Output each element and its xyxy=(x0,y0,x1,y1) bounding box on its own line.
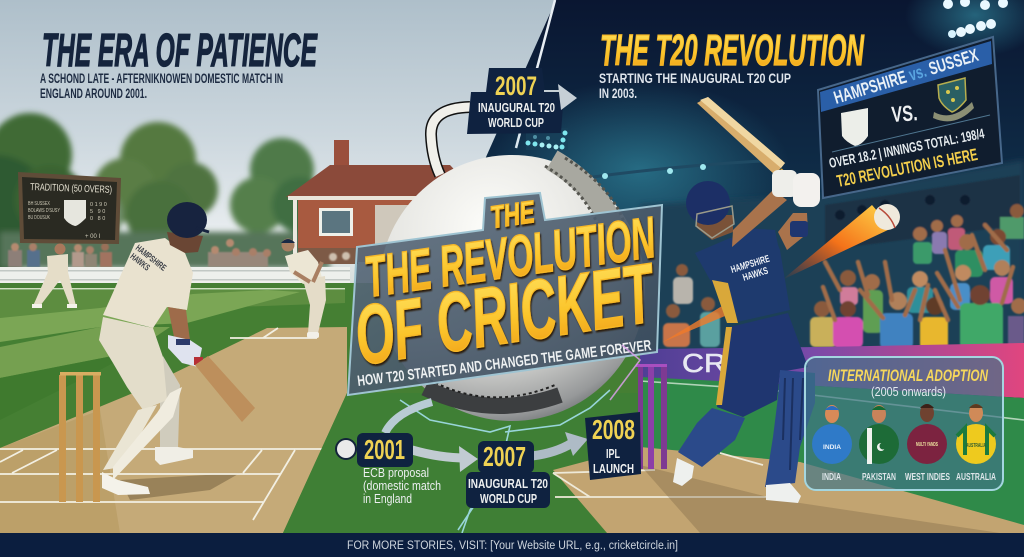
footer bar xyxy=(0,533,1024,557)
wicket stumps right xyxy=(636,364,667,469)
arrow: 2007 badge pointing right xyxy=(544,84,577,110)
icon: west indies player: MULTI YANDS xyxy=(916,442,938,448)
scoreboard left: BH SUSSEX xyxy=(28,201,51,207)
advertising band xyxy=(640,343,1024,398)
left outfield grass xyxy=(0,283,680,533)
country labels: WEST INDIES xyxy=(905,471,950,483)
scoreboard right: HAMPSHIRE vs. SUSSEX xyxy=(831,45,981,108)
floodlights top right xyxy=(905,0,1024,57)
arrow: 2001 to 2007 xyxy=(412,446,478,472)
arrow: 2007 to 2008 xyxy=(532,432,588,456)
timeline xyxy=(335,402,641,508)
scoreboard right: VS. xyxy=(891,100,918,127)
arrow: 2001 ball swoosh xyxy=(385,402,432,433)
milestone: 2001: ECB proposal xyxy=(363,465,429,480)
crowd in the stands xyxy=(640,160,1024,350)
icon: australia player: AUSTRALIA xyxy=(966,443,986,449)
scoreboard right xyxy=(818,37,1002,198)
house xyxy=(286,140,480,264)
milestone: 2001 xyxy=(357,433,441,506)
milestone: 2008: LAUNCH xyxy=(593,461,634,476)
scoreboard left: TRADITION (50 OVERS) xyxy=(30,182,112,196)
icon: india player: INDIA xyxy=(823,444,841,451)
jersey text right: HAWKS xyxy=(741,266,770,284)
title text xyxy=(349,194,663,383)
adoption date: (2005 onwards) xyxy=(871,384,946,399)
advertising band: CR xyxy=(682,348,726,378)
badge: 2007 world cup upper: WORLD CUP xyxy=(488,115,544,130)
milestone: 2007 xyxy=(466,441,550,508)
white divider edge xyxy=(516,0,555,148)
icon: timeline ball xyxy=(335,438,357,460)
jersey text left: HAMPSHIRE xyxy=(134,243,168,273)
floodlights middle xyxy=(526,128,780,179)
right side grass xyxy=(640,377,1024,533)
milestone: 2007: INAUGURAL T20 xyxy=(468,476,548,491)
icon: west indies player xyxy=(907,404,947,464)
text block: t20 revolution description: STARTING THE INAUGURAL T20 CUP xyxy=(599,71,791,86)
spectators behind the fence xyxy=(8,239,350,267)
milestone: 2008 xyxy=(585,412,641,480)
lightning effects xyxy=(400,345,640,533)
batter right in navy kit xyxy=(673,97,820,503)
text block: era of patience description: ENGLAND AROUND 2001. xyxy=(40,86,147,101)
milestone: 2001: in England xyxy=(363,491,412,506)
centre grass xyxy=(283,393,640,533)
batter left in cream kit xyxy=(99,202,255,495)
milestone: 2008: IPL xyxy=(606,446,620,461)
country labels: INDIA xyxy=(822,471,841,483)
scoreboard left: 0 8 0 xyxy=(90,216,105,222)
title text: THE REVOLUTION xyxy=(361,205,660,310)
fielder left xyxy=(32,244,77,308)
icon: australia player xyxy=(956,404,996,464)
milestone: 2008: 2008 xyxy=(592,414,635,445)
country labels: PAKISTAN xyxy=(862,471,896,483)
title text: OF CRICKET xyxy=(349,245,663,383)
milestone: 2001: (domestic match xyxy=(363,478,441,493)
jersey text right: HAMPSHIRE xyxy=(730,254,771,276)
title panel xyxy=(348,193,663,395)
fireball trail and ball xyxy=(663,204,900,342)
jersey text left: HAWKS xyxy=(128,251,152,273)
badge: 2007 world cup upper: INAUGURAL T20 xyxy=(478,100,555,115)
scoreboard left xyxy=(18,172,121,244)
left sky background xyxy=(0,0,560,300)
right night sky background xyxy=(400,0,1024,350)
icon: india player xyxy=(812,405,852,464)
cricket ball centre xyxy=(379,155,645,421)
left pitch xyxy=(0,327,347,533)
footer bar: FOR MORE STORIES, VISIT: [Your Website URL, e.g., cricketcircle.in] xyxy=(347,540,678,552)
scoreboard left: + 00 I xyxy=(85,234,101,240)
badge: 2007 world cup upper: 2007 xyxy=(495,71,537,101)
right side pitch xyxy=(553,447,1024,533)
trees behind the ground xyxy=(0,113,330,275)
jersey text right xyxy=(730,254,775,286)
stadium glow xyxy=(490,80,790,260)
text block: t20 revolution description: IN 2003. xyxy=(599,86,637,101)
scoreboard left: BOLAWS D'SUSY xyxy=(28,208,61,214)
text block: era of patience description: A SCHOND LATE - AFTERNIKNOWEN DOMESTIC MATCH IN xyxy=(40,71,283,86)
milestone: 2007: 2007 xyxy=(483,441,526,472)
heading: the era of patience: THE ERA OF PATIENCE xyxy=(42,24,318,76)
milestone: 2007: WORLD CUP xyxy=(480,491,537,506)
milestone: 2001: 2001 xyxy=(364,434,405,465)
text block: t20 revolution description xyxy=(599,71,791,101)
country labels: AUSTRALIA xyxy=(956,471,996,483)
icon: pakistan player xyxy=(859,405,899,464)
title subtitle: HOW T20 STARTED AND CHANGED THE GAME FOREVER xyxy=(356,337,652,390)
scoreboard left: BU DOUSUK xyxy=(28,215,50,221)
scoreboard left: 0 1 9 0 xyxy=(90,202,107,208)
text block: era of patience description xyxy=(40,71,283,101)
bowler left xyxy=(281,238,326,338)
title text: THE xyxy=(488,194,537,235)
white picket fence xyxy=(0,267,350,283)
jersey text left xyxy=(128,243,168,281)
scoreboard left: 5 9 0 xyxy=(90,209,105,215)
panel: international adoption xyxy=(805,357,1003,490)
country labels xyxy=(822,471,996,483)
badge: 2007 world cup upper xyxy=(431,68,564,175)
wicket stumps left xyxy=(59,372,101,502)
